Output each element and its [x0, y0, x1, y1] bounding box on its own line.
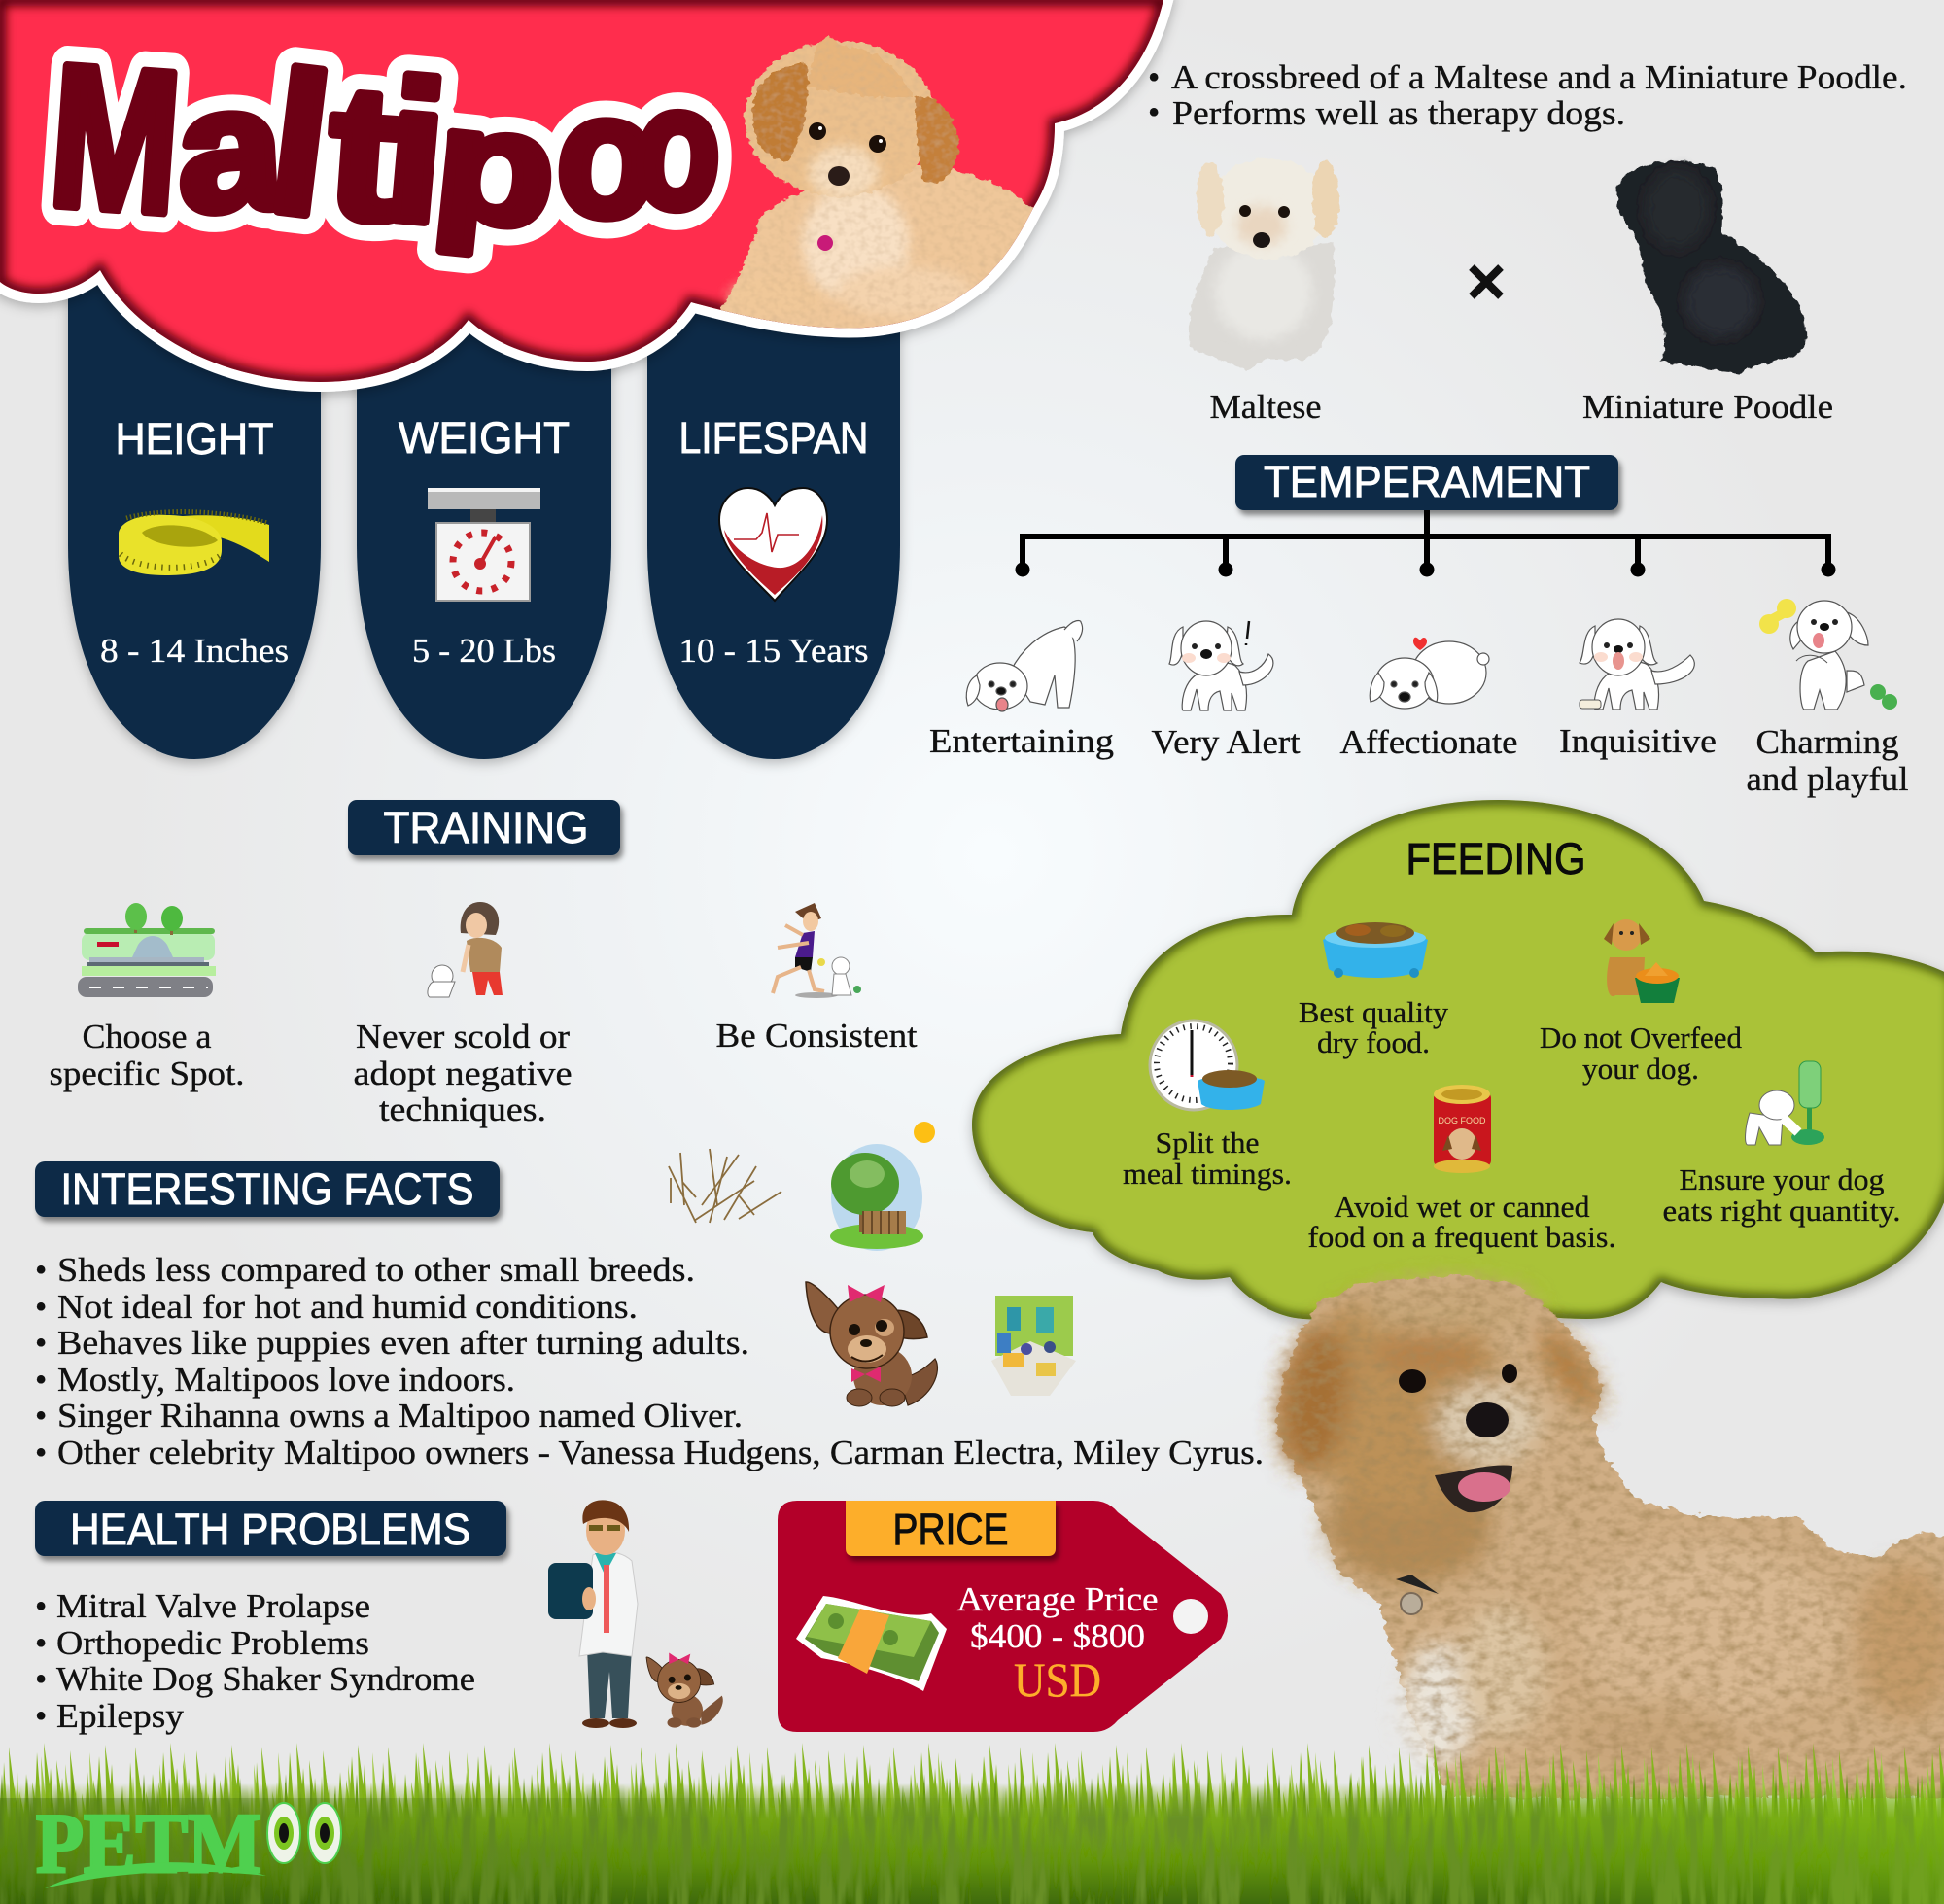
- photo: Maltese: [1189, 158, 1339, 371]
- facts list: Not ideal for hot and humid conditions.: [57, 1288, 638, 1326]
- feeding heading: FEEDING: [1406, 834, 1586, 883]
- stat value: 5 - 20 Lbs: [412, 632, 556, 670]
- feeding: avoid wet food: food on a frequent basis.: [1308, 1220, 1615, 1254]
- Maltese face: [1239, 205, 1290, 248]
- label: Entertaining: [929, 722, 1114, 760]
- title: Maltipoo: t: [322, 45, 406, 261]
- title: Maltipoo: l: [260, 30, 341, 259]
- icon: sun: [914, 1122, 935, 1143]
- feeding: split meal timings: meal timings.: [1123, 1157, 1292, 1191]
- icon: money stack: [796, 1596, 947, 1691]
- facts list: Mostly, Maltipoos love indoors.: [57, 1361, 515, 1399]
- icon: brown cartoon dog small: [646, 1653, 723, 1728]
- facts list: •: [35, 1324, 47, 1362]
- feeding: best quality: dry food.: [1317, 1025, 1430, 1059]
- badge: temperament: TEMPERAMENT: [1264, 457, 1590, 506]
- title: Maltipoo: [44, 23, 727, 265]
- breed labels: Maltese: [1209, 388, 1322, 426]
- badge: health problems: HEALTH PROBLEMS: [70, 1505, 470, 1554]
- price text: $400 - $800: [970, 1617, 1145, 1655]
- icon: alert dog: [1169, 621, 1273, 710]
- heading: lifespan: LIFESPAN: [678, 413, 869, 463]
- title: Maltipoo: p: [428, 71, 564, 262]
- title: Maltipoo: a: [172, 48, 290, 249]
- heading: height: HEIGHT: [115, 414, 274, 464]
- facts list: [35, 1251, 1264, 1471]
- grass: [0, 1735, 1944, 1904]
- photo: main dog: [1271, 1277, 1944, 1798]
- facts list: Singer Rihanna owns a Maltipoo named Oliver.: [57, 1397, 743, 1435]
- facts list: •: [35, 1251, 47, 1289]
- facts list: •: [35, 1361, 47, 1399]
- price text: Average Price: [956, 1580, 1159, 1618]
- panel: lifespan stat: [647, 243, 900, 759]
- feeding: right quantity: [1662, 1061, 1901, 1228]
- title: Maltipoo: p: [428, 71, 564, 262]
- feeding: best quality: [1299, 922, 1449, 1059]
- icon: clock and bowl: [1150, 1021, 1265, 1110]
- icon: brown cartoon dog: [806, 1282, 937, 1406]
- icon: inquisitive dog: [1580, 619, 1694, 710]
- health problems list: [35, 1587, 475, 1735]
- health problems list: Orthopedic Problems: [56, 1624, 369, 1662]
- photo: Miniature Poodle: [1616, 161, 1806, 374]
- icon: bowing dog: [966, 620, 1083, 711]
- badge: training: TRAINING: [383, 803, 589, 852]
- title: Maltipoo: l: [260, 30, 341, 259]
- title: Maltipoo: o: [629, 49, 727, 248]
- temperament: inquisitive: [1559, 619, 1717, 760]
- health problems list: Epilepsy: [56, 1697, 185, 1735]
- panel: weight stat: [357, 243, 611, 759]
- intro text: Performs well as therapy dogs.: [1172, 94, 1625, 132]
- title: Maltipoo: o: [551, 55, 664, 256]
- feeding: right quantity: eats right quantity.: [1662, 1194, 1901, 1228]
- icon: runner with dog: [773, 903, 861, 998]
- label: Do not Overfeed: [1540, 1021, 1742, 1055]
- health problems list: Mitral Valve Prolapse: [56, 1587, 370, 1625]
- panel: price tag: [778, 1501, 1228, 1732]
- breed labels: Miniature Poodle: [1582, 388, 1833, 426]
- title: Maltipoo: t: [322, 45, 406, 261]
- temperament: charming and playful: and playful: [1746, 760, 1909, 798]
- facts list: Sheds less compared to other small breeds.: [57, 1251, 695, 1289]
- badge: training: [348, 800, 620, 855]
- icon: food bowl: [1323, 922, 1428, 978]
- icon: lying dog with heart: [1370, 638, 1489, 709]
- icon: kitchen scale: [428, 488, 540, 601]
- label: Be Consistent: [715, 1017, 918, 1055]
- feeding: split meal timings: [1123, 1021, 1292, 1191]
- tag hole: [1173, 1599, 1208, 1634]
- temperament: charming and playful: [1746, 599, 1909, 798]
- icon: dog at feeder: [1746, 1061, 1824, 1145]
- logo: PETMOO: PETM: [36, 1797, 261, 1891]
- label: Affectionate: [1339, 723, 1518, 761]
- feeding: do not overfeed: your dog.: [1582, 1052, 1699, 1086]
- icon: tape measure: [119, 512, 269, 575]
- training: never scold: techniques.: [379, 1090, 546, 1128]
- health problems list: •: [35, 1697, 47, 1735]
- facts list: •: [35, 1434, 47, 1471]
- title: Maltipoo: i: [377, 38, 455, 265]
- title: Maltipoo: M: [44, 23, 187, 257]
- health problems list: •: [35, 1660, 47, 1698]
- intro text: A crossbreed of a Maltese and a Miniature Poodle.: [1171, 58, 1907, 96]
- label: Avoid wet or canned: [1334, 1190, 1590, 1224]
- icon: tree and fence: [830, 1144, 923, 1251]
- label: Ensure your dog: [1680, 1162, 1884, 1196]
- health problems list: •: [35, 1587, 47, 1625]
- multiply symbol: [1472, 267, 1501, 296]
- icon: dog food can: [1434, 1085, 1491, 1173]
- title: Maltipoo: M: [44, 23, 187, 257]
- title: Maltipoo: o: [551, 55, 664, 256]
- icon: park: [78, 903, 216, 997]
- health problems list: •: [35, 1624, 47, 1662]
- breed labels: [1209, 388, 1833, 426]
- label: Best quality: [1299, 995, 1449, 1029]
- icon: indoor room scene: [991, 1296, 1076, 1396]
- temperament: affectionate: [1339, 638, 1518, 761]
- price text: USD: [1014, 1652, 1101, 1707]
- facts list: Behaves like puppies even after turning adults.: [57, 1324, 749, 1362]
- training: choose a specific spot: specific Spot.: [49, 1055, 245, 1092]
- facts list: •: [35, 1288, 47, 1326]
- label: Choose a: [82, 1018, 212, 1056]
- title: Maltipoo: i: [377, 38, 455, 265]
- icon: veterinarian: [548, 1500, 638, 1728]
- icon: playful dog with toys: [1759, 599, 1897, 710]
- temperament: entertaining: [929, 620, 1114, 760]
- training: choose a specific spot: [49, 903, 245, 1092]
- badge: interesting facts: INTERESTING FACTS: [60, 1164, 474, 1214]
- health problems list: White Dog Shaker Syndrome: [56, 1660, 475, 1698]
- stat value: 10 - 15 Years: [678, 632, 869, 670]
- panel: height stat: [68, 243, 321, 759]
- facts list: Other celebrity Maltipoo owners - Vanessa Hudgens, Carman Electra, Miley Cyrus.: [57, 1434, 1264, 1471]
- label: Never scold or: [356, 1018, 570, 1056]
- puppy photo: [710, 35, 1045, 335]
- icon: dog food can: DOG FOOD: [1439, 1116, 1486, 1125]
- stat value: 8 - 14 Inches: [100, 632, 289, 670]
- title: Maltipoo: a: [172, 48, 290, 249]
- icon: shedding hair: [669, 1149, 781, 1223]
- price heading: PRICE: [892, 1505, 1009, 1554]
- intro text: [1148, 58, 1907, 132]
- training: never scold: adopt negative: [354, 1055, 572, 1092]
- feeding: do not overfeed: [1540, 919, 1742, 1086]
- training: never scold: [354, 902, 572, 1128]
- label: Charming: [1755, 723, 1899, 761]
- temperament connector tree: [1016, 510, 1835, 576]
- panel: feeding cloud: [972, 800, 1944, 1320]
- price text: [956, 1580, 1159, 1707]
- header banner: [0, 0, 1163, 382]
- label: Split the: [1155, 1125, 1260, 1160]
- icon: heart with pulse: [719, 488, 827, 601]
- facts list: •: [35, 1397, 47, 1435]
- price heading: [846, 1501, 1056, 1556]
- label: Inquisitive: [1559, 722, 1717, 760]
- icon: woman scolding dog: [428, 902, 503, 997]
- feeding: avoid wet food: [1308, 1085, 1615, 1254]
- intro text: •: [1148, 93, 1160, 131]
- temperament: very alert: [1151, 621, 1301, 761]
- icon: dog with bowl: [1604, 919, 1680, 1003]
- training: be consistent: [715, 903, 918, 1055]
- intro text: •: [1148, 58, 1160, 96]
- label: Very Alert: [1151, 723, 1301, 761]
- heading: weight: WEIGHT: [399, 413, 570, 463]
- title: Maltipoo: o: [629, 49, 727, 248]
- dog face: [1396, 1364, 1517, 1614]
